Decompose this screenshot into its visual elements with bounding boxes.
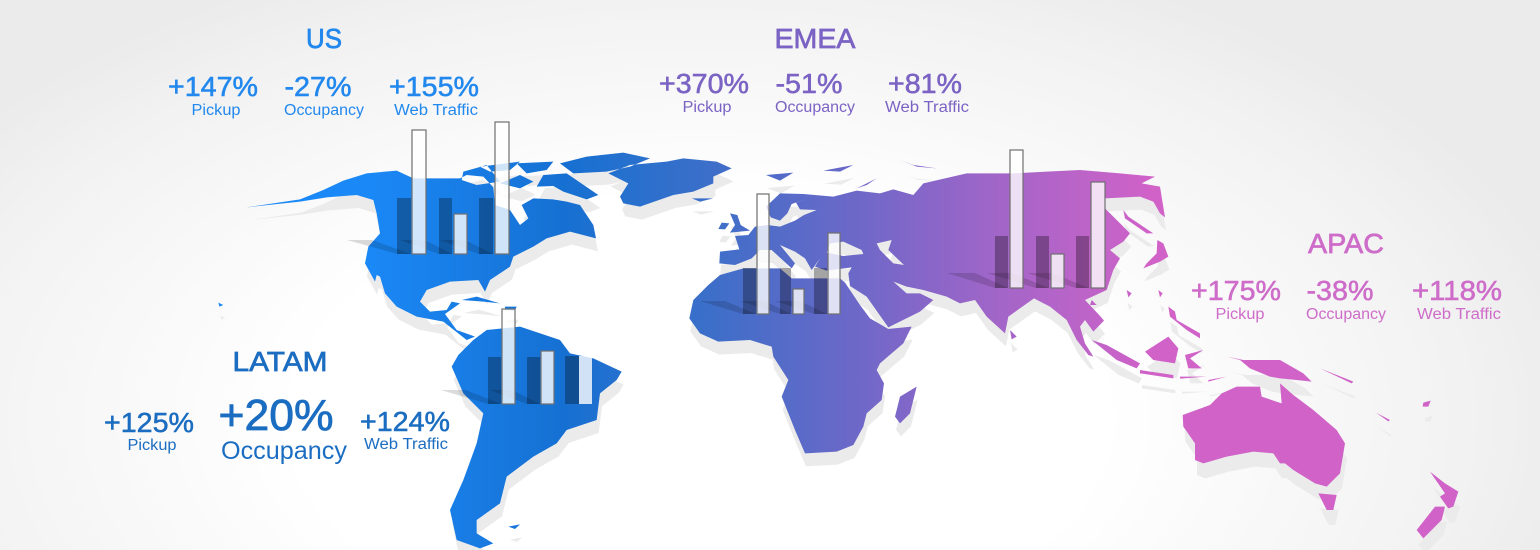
panel: EMEA stats: Web Traffic (885, 99, 969, 116)
panel: APAC stats: +175% (1191, 275, 1281, 306)
panel: EMEA stats: -51% (776, 68, 842, 99)
panel: LATAM stats: Occupancy (221, 437, 348, 465)
panel: US stats: +155% (389, 71, 479, 102)
panel: EMEA stats: Pickup (682, 99, 732, 116)
world map (218, 152, 1458, 548)
panel: EMEA stats: Occupancy (775, 99, 855, 116)
panel: LATAM stats: +125% (104, 407, 194, 438)
bar chart: EMEA (700, 194, 840, 314)
panel: APAC stats: Pickup (1216, 306, 1264, 323)
panel: US stats (168, 23, 479, 119)
panel: US stats: US (306, 23, 342, 54)
panel: US stats: Web Traffic (394, 102, 478, 119)
panel: APAC stats (1191, 228, 1502, 323)
panel: LATAM stats (104, 346, 450, 465)
panel: APAC stats: Web Traffic (1417, 306, 1501, 323)
map shadow (220, 166, 1460, 550)
panel: LATAM stats: Web Traffic (364, 436, 448, 453)
panel: EMEA stats: EMEA (774, 23, 856, 54)
panel: US stats: +147% (168, 71, 258, 102)
panel: APAC stats: +118% (1412, 275, 1502, 306)
panel: APAC stats: Occupancy (1306, 306, 1386, 323)
panel: EMEA stats (659, 23, 969, 116)
panel: LATAM stats: +124% (360, 406, 450, 437)
panel: US stats: Occupancy (284, 102, 364, 119)
bar chart: LATAM (441, 309, 592, 404)
panel: LATAM stats: +20% (218, 391, 334, 440)
panel: APAC stats: -38% (1306, 275, 1374, 306)
panel: EMEA stats: +370% (659, 68, 749, 99)
panel: APAC stats: APAC (1308, 228, 1384, 259)
panel: US stats: Pickup (192, 102, 240, 119)
panel: US stats: -27% (284, 71, 352, 102)
bar chart: US (347, 122, 509, 254)
bar chart: APAC (947, 150, 1105, 288)
panel: LATAM stats: Pickup (128, 437, 176, 454)
panel: EMEA stats: +81% (888, 68, 962, 99)
panel: LATAM stats: LATAM (232, 346, 328, 377)
